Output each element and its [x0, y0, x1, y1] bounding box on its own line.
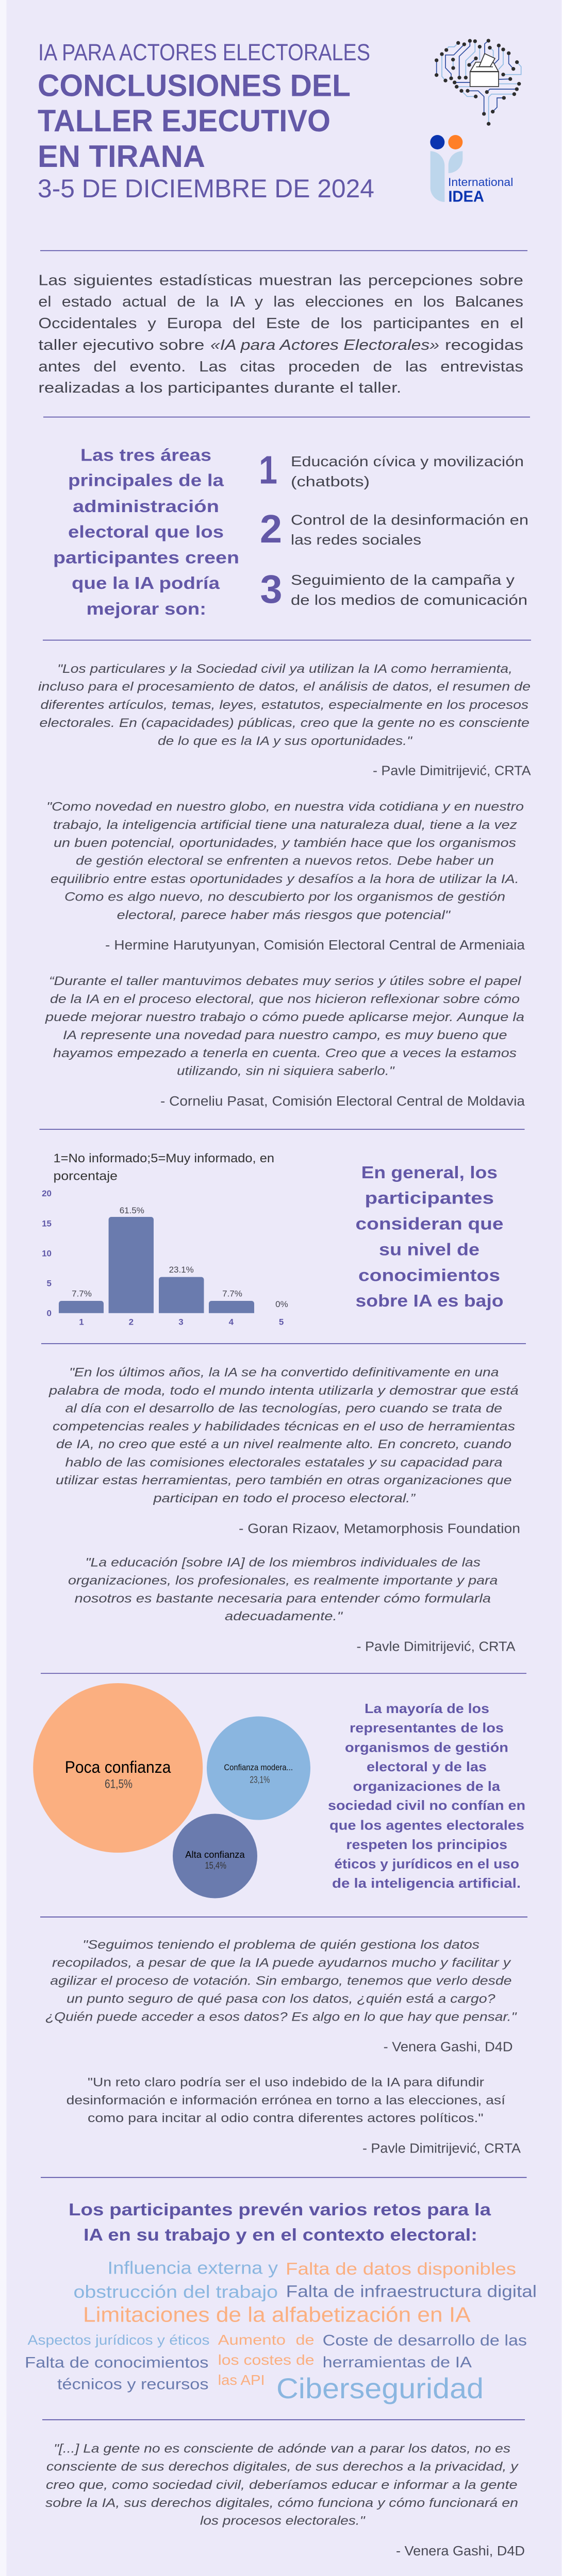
quote: Goran Rizaov 1 — [48, 1365, 520, 1536]
item 2 — [291, 512, 528, 548]
quote: Hermine Harutyunyan: "Como novedad en nuestro globo, en nuestra vida cotidiana y en nuestro — [46, 800, 524, 814]
quote: Goran Rizaov 1: "En los últimos años, la IA se ha convertido definitivamente en una — [69, 1365, 499, 1380]
bubble: alta confianza: Alta confianza — [185, 1849, 245, 1860]
title block: IA PARA ACTORES ELECTORALES — [38, 39, 370, 65]
heading: no confían: respeten los principios — [346, 1837, 507, 1852]
quote: Corneliu Pasat: de la IA en el proceso electoral, que nos hicieron reflexionar sobre cómo — [50, 992, 520, 1006]
quote: Corneliu Pasat: puede mejorar nuestro trabajo o cómo puede aplicarse mejor. Aunque la — [45, 1010, 524, 1024]
word: influencia externa — [73, 2258, 278, 2302]
x axis: 5 — [279, 1317, 284, 1327]
title block — [38, 39, 374, 203]
word cloud: retos — [25, 2258, 537, 2404]
x axis: 3 — [178, 1317, 184, 1327]
heading: tres áreas: mejorar son: — [87, 599, 206, 618]
logo: International IDEA — [430, 135, 513, 206]
value labels: 7.7% — [222, 1289, 242, 1299]
number 2: 2 — [260, 507, 282, 551]
quote: Pavle Dimitrijević 2 — [68, 1556, 516, 1654]
intro text block: antes del evento. Las citas proceden de las entrevistas — [38, 359, 523, 375]
intro text block: Occidentales y Europa del Este de los participantes en el — [38, 315, 523, 332]
quote: Hermine Harutyunyan: un buen potencial, oportunidades, y también hace que los organismos — [54, 836, 516, 850]
bubble: poca confianza: Poca confianza — [65, 1758, 171, 1776]
quote: Corneliu Pasat — [45, 974, 525, 1109]
word: influencia externa: obstrucción del trabajo — [73, 2282, 278, 2302]
word: falta de conocimientos: técnicos y recursos — [57, 2376, 208, 2393]
quote: Venera Gashi 2 — [45, 2442, 525, 2558]
number 3: 3 — [260, 567, 283, 612]
word: aspectos jurídicos: Aspectos jurídicos y éticos — [28, 2332, 209, 2348]
quote: Hermine Harutyunyan: Como es algo nuevo, no descubierto por los organismos de gestión — [64, 890, 505, 904]
heading: retos — [69, 2200, 491, 2244]
quote: Pavle Dimitrijević 1: de lo que es la IA y sus oportunidades." — [158, 734, 412, 748]
logo: International IDEA: IDEA — [448, 188, 484, 206]
x axis — [79, 1317, 284, 1327]
quote: Pavle Dimitrijević 1: incluso para el procesamiento de datos, el análisis de datos, el resumen de — [38, 680, 531, 694]
heading: no confían: que los agentes electorales — [329, 1818, 524, 1833]
quote: Venera Gashi 1: un punto seguro de qué pasa con los datos, ¿quién está a cargo? — [67, 1992, 495, 2006]
item 1 — [291, 453, 524, 489]
quote: Goran Rizaov 1: participan en todo el proceso electoral.” — [153, 1492, 416, 1505]
quote: Venera Gashi 2: "[...] La gente no es consciente de adónde van a parar los datos, no es — [54, 2442, 510, 2456]
word: limitaciones: Limitaciones de la alfabetización en IA — [83, 2303, 471, 2327]
word: ciberseguridad: Ciberseguridad — [276, 2372, 484, 2404]
item 3: Seguimiento de la campaña y — [291, 572, 515, 588]
quote: Goran Rizaov 1: utilizar estas herramientas, pero también en otras organizaciones que — [56, 1473, 511, 1487]
word: coste de desarrollo — [323, 2332, 527, 2371]
intro text block: realizadas a los participantes durante el taller. — [38, 380, 401, 396]
title block: CONCLUSIONES DEL — [38, 68, 351, 103]
y axis: 0 — [47, 1309, 52, 1318]
heading: no confían: éticos y jurídicos en el uso — [334, 1856, 519, 1872]
bubble: confianza moderada — [207, 1717, 310, 1820]
quote: Corneliu Pasat: “Durante el taller mantuvimos debates muy serios y útiles sobre el papel — [49, 974, 521, 988]
x axis: 4 — [229, 1317, 234, 1327]
quote: Goran Rizaov 1: competencias reales y habilidades técnicas en el uso de herramientas — [53, 1419, 515, 1433]
quote: Pavle Dimitrijević 2: - Pavle Dimitrijević, CRTA — [357, 1639, 516, 1654]
heading: tres áreas: principales de la — [68, 470, 224, 489]
heading: no confían: sociedad civil no confían en — [328, 1798, 525, 1813]
heading: tres áreas: participantes creen — [53, 548, 239, 567]
quote: Venera Gashi 1: ¿Quién puede acceder a esos datos? Es algo en lo que hay que pensar." — [45, 2010, 517, 2024]
intro text block: recogidas — [445, 337, 523, 353]
word: aumento de costes: las API — [218, 2372, 265, 2388]
logo: International IDEA: International — [448, 176, 513, 189]
intro text block: Las siguientes estadísticas muestran las percepciones sobre — [38, 273, 523, 289]
value labels: 61.5% — [120, 1206, 144, 1215]
x axis: 1 — [79, 1317, 84, 1327]
value labels: 0% — [275, 1299, 288, 1309]
word: aumento de costes: Aumento — [218, 2332, 286, 2348]
word: falta de conocimientos — [25, 2354, 208, 2393]
list: three areas — [259, 448, 528, 612]
quote: Pavle Dimitrijević 3: "Un reto claro podría ser el uso indebido de la IA para difundir — [88, 2076, 484, 2090]
quote: Hermine Harutyunyan: electoral, parece haber más riesgos que potencial" — [117, 908, 451, 922]
quote: Hermine Harutyunyan — [46, 800, 525, 953]
word: influencia externa: Influencia externa y — [107, 2258, 278, 2278]
quote: Corneliu Pasat: IA represente una novedad para nuestro campo, es muy bueno que — [63, 1028, 507, 1042]
heading: no confían: electoral y de las — [367, 1759, 487, 1774]
heading: no confían: de la inteligencia artificial. — [332, 1875, 521, 1891]
bubble: confianza moderada: 23,1% — [250, 1774, 270, 1785]
bubble chart: confianza — [33, 1683, 310, 1898]
item 1: (chatbots) — [291, 473, 370, 489]
word: aumento de costes: de — [296, 2332, 315, 2348]
quote: Pavle Dimitrijević 2: adecuadamente." — [225, 1609, 343, 1623]
heading: tres áreas: administración — [73, 497, 219, 516]
intro text block: «IA para Actores Electorales» — [210, 337, 439, 353]
intro text block: el estado actual de la IA y las elecciones en los Balcanes — [38, 294, 523, 310]
quote: Venera Gashi 2: sobre la IA, sus derechos digitales, cómo funciona y cómo funcionará en — [45, 2496, 518, 2510]
bars — [59, 1217, 254, 1313]
item 3 — [291, 572, 527, 608]
heading: no confían: organizaciones de la — [353, 1778, 501, 1794]
quote: Pavle Dimitrijević 3 — [67, 2076, 521, 2156]
quote: Goran Rizaov 1: hablo de las comisiones electorales estatales y su capacidad para — [65, 1456, 502, 1469]
quote: Goran Rizaov 1: - Goran Rizaov, Metamorphosis Foundation — [239, 1522, 520, 1536]
intro text block — [38, 273, 523, 396]
quote: Goran Rizaov 1: palabra de moda, todo el mundo intenta utilizarla y demostrar que está — [48, 1384, 519, 1398]
heading: no confían: organismos de gestión — [345, 1739, 508, 1755]
bubble: confianza moderada: Confianza modera... — [224, 1763, 293, 1772]
heading: nivel de conocimientos bajo: participantes — [365, 1189, 494, 1208]
heading: tres áreas — [53, 446, 239, 618]
heading: tres áreas: electoral que los — [68, 522, 224, 541]
quote: Pavle Dimitrijević 2: organizaciones, los profesionales, es realmente importante y para — [68, 1573, 498, 1588]
quote: Venera Gashi 1 — [45, 1938, 517, 2055]
heading: no confían — [328, 1701, 525, 1891]
intro text block: taller ejecutivo sobre — [38, 337, 204, 353]
quote: Hermine Harutyunyan: equilibrio entre estas oportunidades y desafíos a la hora de utilizar la IA. — [51, 872, 519, 886]
quote: Pavle Dimitrijević 1: electorales. En (capacidades) públicas, creo que la gente no es consciente — [39, 716, 530, 730]
heading: no confían: representantes de los — [350, 1720, 504, 1735]
heading: no confían: La mayoría de los — [365, 1701, 489, 1716]
title block: 3-5 DE DICIEMBRE DE 2024 — [38, 174, 374, 203]
number 1: 1 — [259, 448, 277, 493]
x axis: 2 — [129, 1317, 134, 1327]
quote: Pavle Dimitrijević 2: "La educación [sobre IA] de los miembros individuales de las — [85, 1556, 481, 1570]
word: coste de desarrollo: Coste de desarrollo de las — [323, 2332, 527, 2349]
y axis: 10 — [42, 1249, 52, 1258]
quote: Goran Rizaov 1: de IA, no creo que esté a un nivel realmente alto. En concreto, cuando — [56, 1437, 511, 1451]
quote: Pavle Dimitrijević 1: "Los particulares y la Sociedad civil ya utilizan la IA como herramienta, — [57, 662, 513, 676]
heading: nivel de conocimientos bajo: su nivel de — [379, 1240, 480, 1259]
bubble: poca confianza — [33, 1683, 203, 1853]
word: falta de infraestructura: Falta de infraestructura digital — [286, 2282, 537, 2300]
quote: Venera Gashi 1: "Seguimos teniendo el problema de quién gestiona los datos — [82, 1938, 480, 1952]
quote: Venera Gashi 2: consciente de sus derechos digitales, de sus derechos a la privacidad, y — [46, 2460, 519, 2474]
item 1: Educación cívica y movilización — [291, 453, 524, 469]
title block: EN TIRANA — [38, 139, 205, 174]
quote: Pavle Dimitrijević 1: - Pavle Dimitrijević, CRTA — [373, 764, 531, 778]
heading: nivel de conocimientos bajo: consideran que — [356, 1214, 503, 1233]
y axis: 15 — [42, 1218, 52, 1228]
chart title — [54, 1151, 274, 1183]
word: aumento de costes — [218, 2332, 315, 2388]
heading: nivel de conocimientos bajo: conocimientos — [358, 1266, 500, 1285]
quote: Hermine Harutyunyan: de gestión electoral se enfrenten a nuevos retos. Debe haber un — [76, 854, 494, 868]
word: falta de conocimientos: Falta de conocimientos — [25, 2354, 208, 2371]
quote: Venera Gashi 2: creo que, como sociedad civil, deberíamos educar e informar a la gente — [46, 2478, 518, 2492]
heading: tres áreas: Las tres áreas — [80, 446, 211, 465]
y axis: 20 — [42, 1189, 52, 1198]
item 2: las redes sociales — [291, 532, 421, 548]
quote: Pavle Dimitrijević 2: nosotros es bastante necesaria para entender cómo formularla — [75, 1591, 491, 1605]
value labels — [72, 1206, 288, 1309]
item 3: de los medios de comunicación — [291, 592, 527, 608]
word: coste de desarrollo: herramientas de IA — [323, 2354, 472, 2371]
quote: Pavle Dimitrijević 1 — [38, 662, 531, 778]
title block: TALLER EJECUTIVO — [38, 104, 330, 138]
quote: Venera Gashi 1: agilizar el proceso de votación. Sin embargo, tenemos que verlo desde — [50, 1974, 512, 1988]
bubble: poca confianza: 61,5% — [105, 1777, 133, 1791]
heading: nivel de conocimientos bajo: sobre IA es bajo — [356, 1291, 503, 1310]
heading: retos: Los participantes prevén varios retos para la — [69, 2200, 491, 2219]
bubble: alta confianza: 15,4% — [205, 1860, 226, 1871]
value labels: 7.7% — [72, 1289, 92, 1299]
item 2: Control de la desinformación en — [291, 512, 528, 528]
bar chart: nivel de conocimientos — [42, 1151, 288, 1327]
quote: Pavle Dimitrijević 3: - Pavle Dimitrijević, CRTA — [362, 2142, 521, 2156]
quote: Pavle Dimitrijević 3: desinformación e información errónea en torno a las elecciones, así — [67, 2093, 505, 2107]
quote: Venera Gashi 2: los procesos electorales." — [200, 2514, 366, 2528]
quote: Pavle Dimitrijević 3: como para incitar al odio contra diferentes actores políticos." — [88, 2111, 484, 2125]
word: falta de datos: Falta de datos disponibles — [286, 2259, 516, 2278]
heading: nivel de conocimientos bajo — [356, 1163, 503, 1310]
chart title: 1=No informado;5=Muy informado, en — [54, 1151, 274, 1165]
quote: Corneliu Pasat: - Corneliu Pasat, Comisión Electoral Central de Moldavia — [160, 1094, 525, 1109]
y axis — [42, 1189, 52, 1318]
icon: brain circuit with ballot box — [435, 39, 521, 126]
quote: Venera Gashi 2: - Venera Gashi, D4D — [396, 2544, 525, 2558]
bubble: alta confianza — [173, 1814, 257, 1898]
value labels: 23.1% — [169, 1265, 194, 1275]
y axis: 5 — [47, 1279, 52, 1288]
quote: Goran Rizaov 1: al día con el desarrollo de las tecnologías, pero cuando se trata de — [65, 1402, 502, 1416]
heading: nivel de conocimientos bajo: En general, los — [361, 1163, 498, 1182]
quote: Corneliu Pasat: hayamos empezado a tenerla en cuenta. Creo que a veces la estamos — [53, 1046, 517, 1060]
heading: retos: IA en su trabajo y en el contexto electoral: — [84, 2225, 477, 2244]
quote: Hermine Harutyunyan: trabajo, la inteligencia artificial tiene una naturaleza dual, tiene a la vez — [53, 818, 517, 832]
quote: Corneliu Pasat: utilizando, sin ni siquiera saberlo." — [177, 1064, 395, 1078]
quote: Venera Gashi 1: recopilados, a pesar de que la IA puede ayudarnos mucho y facilitar y — [52, 1956, 511, 1970]
quote: Hermine Harutyunyan: - Hermine Harutyunyan, Comisión Electoral Central de Armeniaia — [105, 938, 525, 953]
word: aumento de costes: los costes de — [218, 2352, 315, 2368]
quote: Pavle Dimitrijević 1: diferentes artículos, temas, leyes, estatutos, especialmente en los procesos — [40, 698, 528, 712]
heading: tres áreas: que la IA podría — [72, 573, 220, 592]
chart title: porcentaje — [54, 1170, 118, 1183]
quote: Venera Gashi 1: - Venera Gashi, D4D — [384, 2040, 513, 2055]
